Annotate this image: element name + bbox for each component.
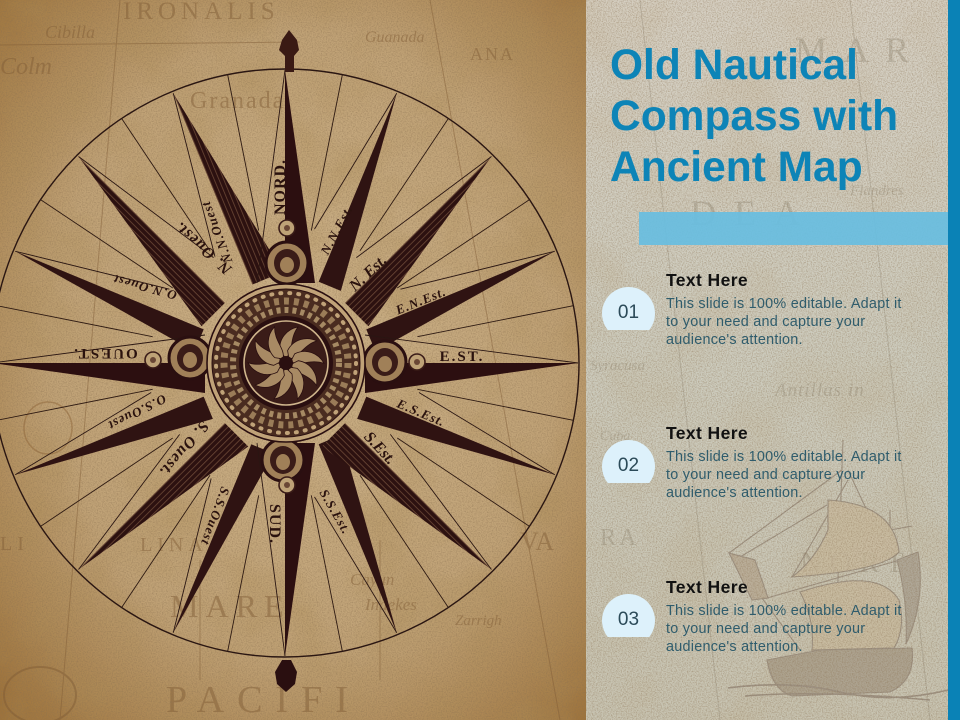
faint map lettering on left: MARE bbox=[170, 588, 290, 624]
cardinal ornaments bbox=[145, 220, 425, 493]
rigging bbox=[729, 440, 912, 660]
hull bbox=[767, 648, 913, 696]
stern sail bbox=[897, 552, 920, 644]
heading 01: Text Here bbox=[666, 270, 748, 290]
faint map lettering on right: Cuba bbox=[600, 429, 630, 444]
compass star points bbox=[0, 70, 578, 656]
compass rose bbox=[0, 30, 579, 692]
badge 02 bbox=[602, 440, 655, 483]
faint map lettering on left: LINA bbox=[140, 534, 208, 556]
faint ship illustration bbox=[728, 440, 948, 700]
body text 02: to your need and capture your bbox=[666, 467, 865, 483]
badge 03 bbox=[602, 594, 655, 637]
body text 01: This slide is 100% editable. Adapt it bbox=[666, 296, 902, 312]
faint map lettering on left: Indekes bbox=[364, 595, 417, 614]
faint map lettering on left: Colm bbox=[0, 54, 52, 80]
compass direction labels: O.S.Ouest bbox=[106, 391, 169, 433]
compass direction labels: N.N.Ouest bbox=[198, 199, 236, 266]
list item 02 bbox=[602, 423, 902, 501]
faint map lettering on left: Cayun bbox=[350, 570, 394, 589]
lower sail bbox=[800, 581, 902, 650]
body text 02: This slide is 100% editable. Adapt it bbox=[666, 449, 902, 465]
faint map lettering on right bbox=[590, 0, 930, 720]
compass direction labels: E.N.Est. bbox=[392, 284, 448, 318]
title: Ancient Map bbox=[610, 144, 863, 191]
compass direction labels: S. Ouest. bbox=[155, 417, 212, 480]
faint map lettering on left bbox=[0, 0, 560, 720]
compass direction labels: N. Ouest. bbox=[171, 218, 236, 278]
fore sail bbox=[729, 553, 768, 600]
faint map lettering on right: Flandres bbox=[849, 183, 904, 199]
compass rhumb lines bbox=[0, 75, 573, 651]
body text 03: audience's attention. bbox=[666, 639, 803, 655]
faint map lettering on right: NORT bbox=[800, 546, 912, 579]
compass direction labels: E.ST. bbox=[440, 349, 484, 365]
compass direction labels: S.S.Est. bbox=[317, 487, 354, 537]
compass direction labels: N. Est. bbox=[345, 252, 391, 296]
badge 03: 03 bbox=[618, 609, 639, 630]
accent bar under title bbox=[639, 212, 948, 245]
compass direction labels: O.N.Ouest bbox=[111, 272, 178, 303]
badge 02: 02 bbox=[618, 455, 639, 476]
faint map lettering on left: LI bbox=[0, 533, 29, 555]
title: Old Nautical bbox=[610, 42, 858, 89]
title bbox=[610, 42, 898, 191]
list item 03 bbox=[602, 577, 902, 655]
compass direction labels: OUEST. bbox=[72, 345, 138, 361]
compass outer circle bbox=[0, 69, 579, 657]
heading 03: Text Here bbox=[666, 577, 748, 597]
heading 02: Text Here bbox=[666, 423, 748, 443]
faint map lettering on left: PACIFI bbox=[166, 679, 361, 720]
faint map lettering on left: ANA bbox=[470, 44, 515, 64]
upper sail bbox=[792, 500, 899, 577]
compass south finial bbox=[275, 660, 297, 692]
body text 02 bbox=[666, 449, 902, 501]
faint map lettering on right: DEA bbox=[690, 193, 818, 233]
compass north finial bbox=[279, 30, 299, 72]
faint map lettering on left: Granada bbox=[190, 88, 285, 114]
compass direction labels: NORD. bbox=[272, 159, 289, 215]
list item 01 bbox=[602, 270, 902, 348]
body text 01: to your need and capture your bbox=[666, 314, 865, 330]
faint map lettering on right: MAR bbox=[795, 30, 925, 70]
body text 03 bbox=[666, 603, 902, 655]
compass direction labels bbox=[72, 159, 484, 547]
faint map lettering on right: RA bbox=[600, 525, 639, 551]
body text 03: This slide is 100% editable. Adapt it bbox=[666, 603, 902, 619]
right map panel bbox=[586, 0, 960, 720]
faint map lettering on left: Zarrigh bbox=[455, 613, 502, 629]
badge 01 bbox=[602, 287, 655, 330]
body text 03: to your need and capture your bbox=[666, 621, 865, 637]
body text 01: audience's attention. bbox=[666, 332, 803, 348]
faint map lettering on left: Cibilla bbox=[45, 22, 95, 42]
faint map lettering on left: Guanada bbox=[365, 29, 425, 46]
left map parchment bbox=[0, 0, 586, 720]
right edge bar bbox=[948, 0, 960, 720]
compass central medallion bbox=[207, 284, 365, 442]
faint map lettering on right: Syracusa bbox=[590, 358, 645, 374]
faint map lettering on right: Antillas in bbox=[773, 380, 865, 401]
compass direction labels: S.S.Ouest bbox=[198, 485, 233, 547]
faint map lettering on left: VA bbox=[520, 527, 554, 556]
waves bbox=[728, 685, 948, 700]
title: Compass with bbox=[610, 93, 898, 140]
body text 02: audience's attention. bbox=[666, 485, 803, 501]
compass direction labels: N.N.Est. bbox=[317, 202, 356, 258]
compass direction labels: E.S.Est. bbox=[394, 395, 448, 429]
compass direction labels: S.Est. bbox=[360, 429, 399, 468]
compass direction labels: SUD. bbox=[266, 504, 283, 544]
badge 01: 01 bbox=[618, 302, 639, 323]
rosette bbox=[248, 327, 324, 399]
body text 01 bbox=[666, 296, 902, 348]
